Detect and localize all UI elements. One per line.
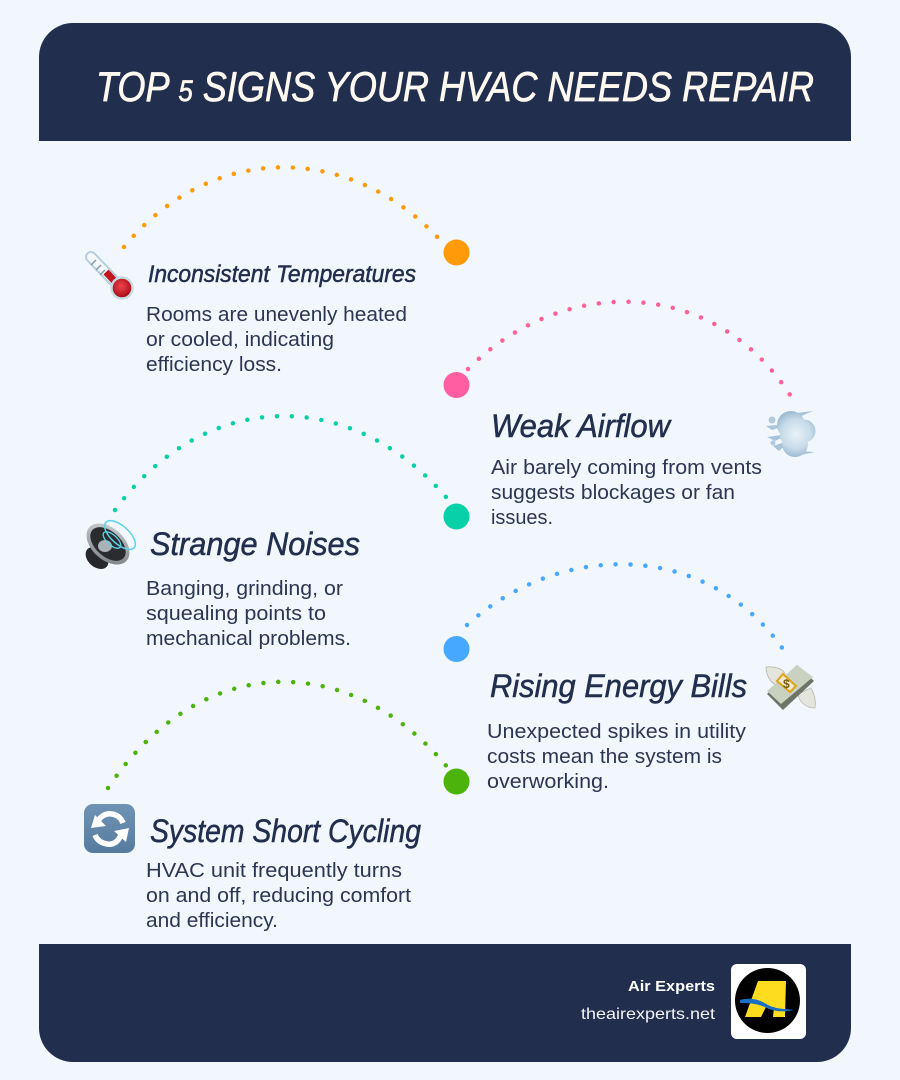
logo: [731, 964, 806, 1039]
description: and efficiency.: [146, 910, 278, 932]
dotted arc: bills: [444, 564, 785, 662]
description: [146, 860, 411, 932]
node: pink: [444, 372, 470, 398]
brand name: Air Experts: [628, 978, 715, 995]
website: theairexperts.net: [581, 1006, 716, 1023]
item 2: weak airflow: [491, 408, 762, 529]
description: squealing points to: [146, 603, 326, 625]
description: Rooms are unevenly heated: [146, 304, 407, 326]
item 3: strange noises: [146, 526, 360, 650]
node: teal: [444, 504, 470, 530]
icon: money with wings: [766, 665, 815, 710]
icon: thermometer: [91, 257, 134, 300]
item 1: inconsistent temperatures: [146, 261, 416, 376]
node: orange: [444, 240, 470, 266]
description: mechanical problems.: [146, 628, 351, 650]
dotted arc: noises: [115, 416, 470, 530]
header banner: [39, 23, 851, 141]
description: on and off, reducing comfort: [146, 885, 411, 907]
dotted arc: temperatures: [124, 167, 470, 266]
description: [491, 457, 762, 529]
icon: money with wings: $: [783, 677, 790, 691]
footer banner: [39, 944, 851, 1062]
description: Banging, grinding, or: [146, 578, 343, 600]
heading: Inconsistent Temperatures: [148, 261, 416, 288]
description: costs mean the system is: [487, 746, 722, 768]
description: or cooled, indicating: [146, 329, 334, 351]
heading: Rising Energy Bills: [490, 668, 747, 704]
description: efficiency loss.: [146, 354, 282, 376]
node: blue: [444, 636, 470, 662]
description: [487, 721, 746, 793]
description: overworking.: [487, 771, 609, 793]
item 5: system short cycling: [146, 813, 421, 932]
dotted arc: airflow: [444, 302, 792, 398]
heading: System Short Cycling: [150, 813, 421, 849]
description: HVAC unit frequently turns: [146, 860, 402, 882]
description: issues.: [491, 507, 553, 529]
title: TOP 5 SIGNS YOUR HVAC NEEDS REPAIR: [96, 63, 814, 110]
icon: speaker: [79, 515, 140, 573]
description: [146, 304, 407, 376]
heading: Strange Noises: [150, 526, 360, 562]
node: green: [444, 768, 470, 794]
description: suggests blockages or fan: [491, 482, 735, 504]
icon: cycling arrows: [84, 804, 135, 853]
dotted arc: short cycling: [108, 682, 470, 794]
heading: Weak Airflow: [491, 408, 672, 444]
icon: wind cloud: [766, 411, 816, 457]
description: [146, 578, 351, 650]
item 4: rising energy bills: [487, 668, 747, 793]
description: Air barely coming from vents: [491, 457, 762, 479]
description: Unexpected spikes in utility: [487, 721, 746, 743]
